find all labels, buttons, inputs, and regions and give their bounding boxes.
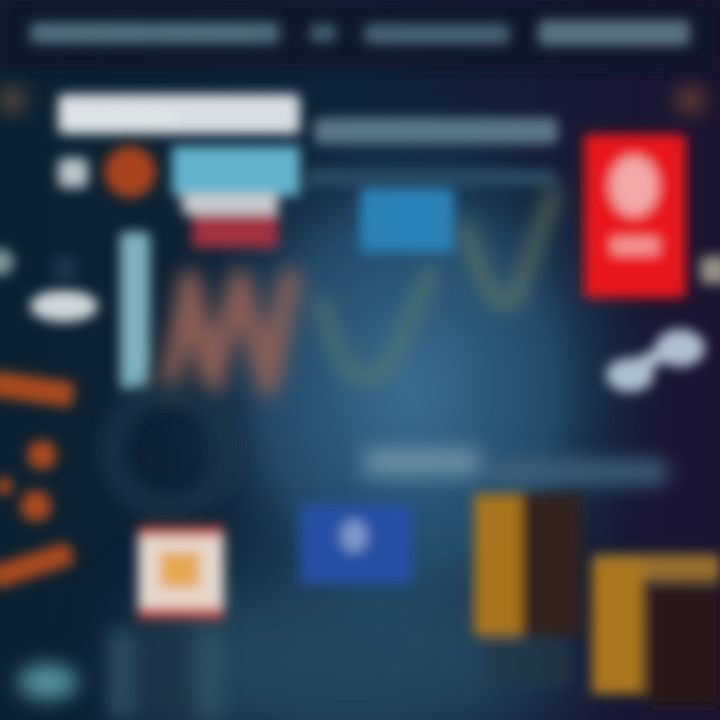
dark circular gauge	[112, 392, 228, 508]
chart bar: pale axis	[120, 232, 150, 390]
line chart panel	[120, 188, 555, 390]
title	[30, 20, 690, 46]
pillars under red card	[110, 630, 222, 720]
orange network graphic	[0, 371, 76, 590]
icon: right edge tag	[700, 256, 720, 284]
icon: dark stem above cloud	[54, 256, 76, 282]
stacked flag chart block	[172, 146, 300, 248]
chart: blue block	[360, 188, 454, 252]
gold column left	[474, 494, 582, 686]
bottom left badge	[18, 664, 78, 700]
lower caption text	[364, 448, 668, 484]
corner dots	[0, 86, 704, 114]
subheading text	[306, 118, 558, 186]
icon: circle at left edge	[0, 248, 14, 276]
red and cream card	[138, 526, 224, 620]
icon: white cloud	[30, 290, 98, 322]
left icons	[0, 248, 98, 322]
heading: Heading	[60, 100, 178, 133]
chart: warm zigzag lines	[170, 190, 555, 385]
heading	[58, 94, 300, 188]
icon: white link shape	[606, 329, 705, 392]
red callout	[584, 134, 686, 298]
icon: orange circle	[104, 146, 156, 198]
blue card	[300, 504, 412, 584]
gold column right	[592, 554, 720, 706]
title: Infographic overview	[30, 20, 251, 45]
